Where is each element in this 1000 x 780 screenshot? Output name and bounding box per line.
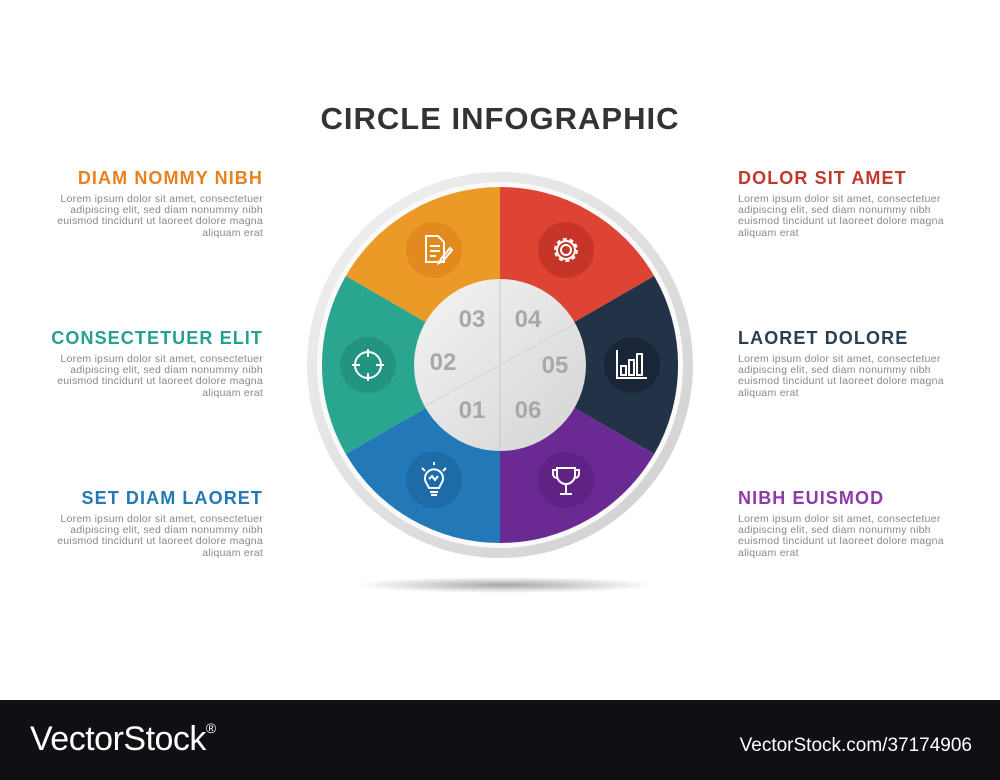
segment 02 teal [322,276,500,454]
text: diam nommy nibh [57,168,263,239]
text: consectetuer elit: aliquam erat [202,387,263,399]
center numbers disc: 01 [459,397,485,424]
segment 03 orange [346,187,500,365]
text: consectetuer elit: adipiscing elit, sed diam nonummy nibh [70,364,263,376]
text: diam nommy nibh: aliquam erat [202,227,263,239]
text: consectetuer elit [51,328,263,399]
center numbers disc: 02 [430,349,456,376]
text: set diam laoret: SET DIAM LAORET [82,488,263,508]
text: nibh euismod: Lorem ipsum dolor sit amet, consectetuer [738,513,941,525]
text: laoret dolore [738,328,944,399]
text: diam nommy nibh: adipiscing elit, sed diam nonummy nibh [70,204,263,216]
text: nibh euismod [738,488,944,559]
text: dolor sit amet [738,168,944,239]
text: set diam laoret: aliquam erat [202,547,263,559]
text: dolor sit amet: aliquam erat [738,227,799,239]
text: laoret dolore: Lorem ipsum dolor sit amet, consectetuer [738,353,941,365]
center numbers disc: 04 [515,306,542,333]
text: set diam laoret: Lorem ipsum dolor sit amet, consectetuer [60,513,263,525]
text: nibh euismod: NIBH EUISMOD [738,488,884,508]
text: consectetuer elit: Lorem ipsum dolor sit amet, consectetuer [60,353,263,365]
text: dolor sit amet: euismod tincidunt ut laoreet dolore magna [738,215,944,227]
text: dolor sit amet: adipiscing elit, sed diam nonummy nibh [738,204,931,216]
text: set diam laoret: adipiscing elit, sed diam nonummy nibh [70,524,263,536]
segment 04 red [500,187,654,365]
center numbers disc [414,279,586,451]
footer id: VectorStock.com/37174906 [740,735,972,756]
text: dolor sit amet: Lorem ipsum dolor sit amet, consectetuer [738,193,941,205]
text: diam nommy nibh: euismod tincidunt ut laoreet dolore magna [57,215,263,227]
title: CIRCLE INFOGRAPHIC [320,101,680,136]
center numbers disc: 03 [459,306,485,333]
text: laoret dolore: adipiscing elit, sed diam nonummy nibh [738,364,931,376]
text: consectetuer elit: euismod tincidunt ut laoreet dolore magna [57,375,263,387]
text: laoret dolore: aliquam erat [738,387,799,399]
text: nibh euismod: euismod tincidunt ut laoreet dolore magna [738,535,944,547]
segment 06 purple [500,365,654,543]
text: nibh euismod: aliquam erat [738,547,799,559]
text: consectetuer elit: CONSECTETUER ELIT [51,328,263,348]
text: diam nommy nibh: DIAM NOMMY NIBH [78,168,263,188]
center numbers disc: 06 [515,397,541,424]
text: laoret dolore: LAORET DOLORE [738,328,908,348]
text: dolor sit amet: DOLOR SIT AMET [738,168,907,188]
text: laoret dolore: euismod tincidunt ut laoreet dolore magna [738,375,944,387]
text: set diam laoret [57,488,263,559]
center numbers disc: 05 [542,352,568,379]
text: diam nommy nibh: Lorem ipsum dolor sit amet, consectetuer [60,193,263,205]
text: set diam laoret: euismod tincidunt ut laoreet dolore magna [57,535,263,547]
segment 01 blue [346,365,500,543]
text: nibh euismod: adipiscing elit, sed diam nonummy nibh [738,524,931,536]
segment 05 navy [500,276,678,454]
footer bar [0,700,1000,780]
footer logo: VectorStock® [30,720,216,758]
